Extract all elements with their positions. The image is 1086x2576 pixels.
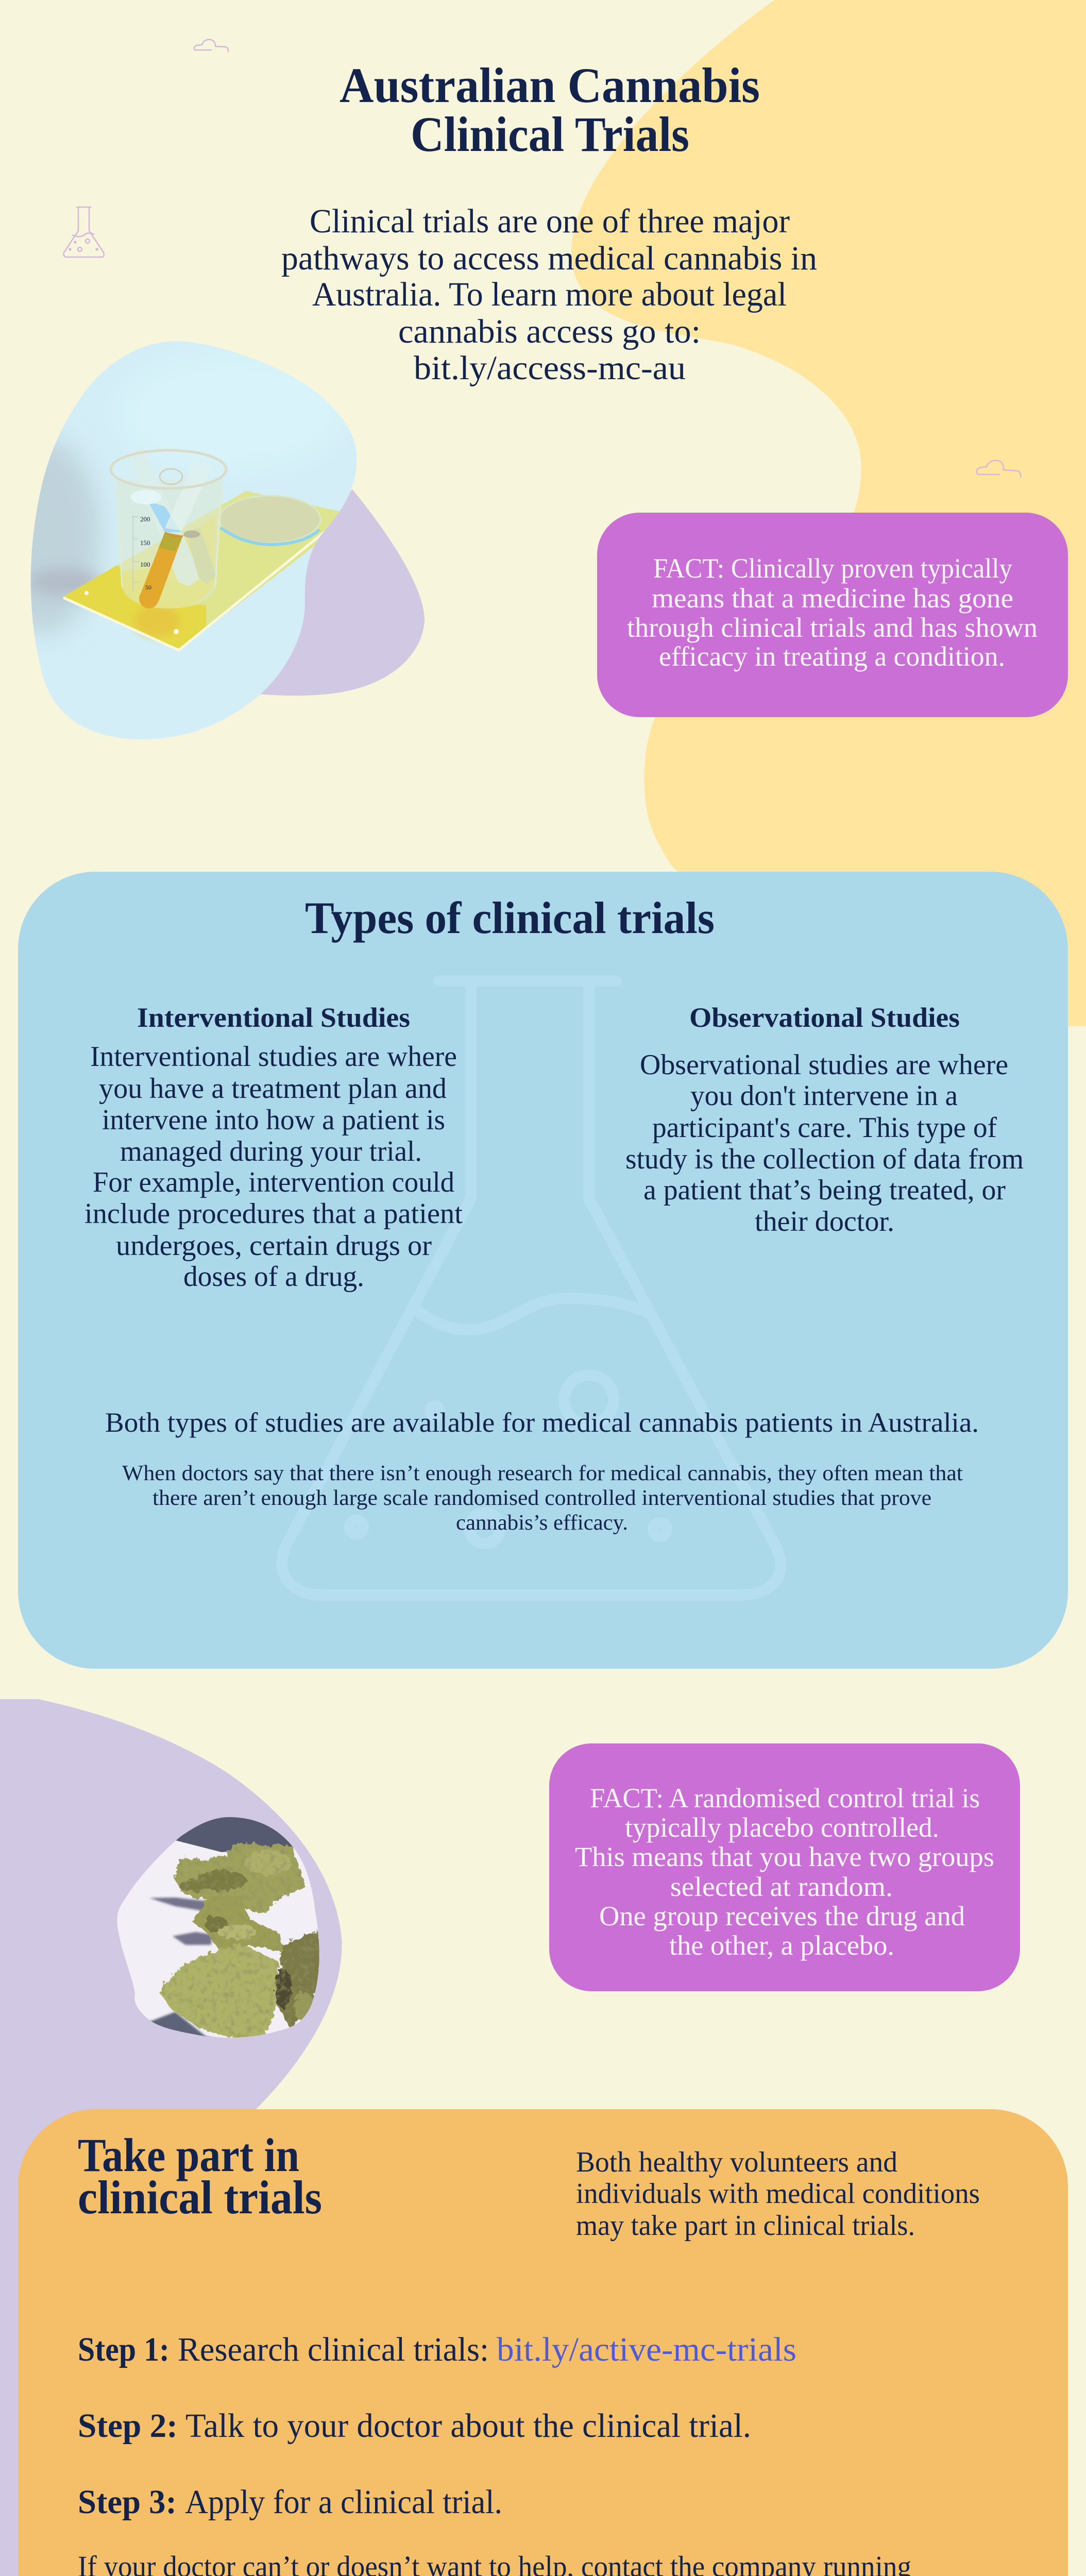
step 3: Step 3: (78, 2483, 177, 2521)
purple blob behind beaker photo (258, 489, 425, 696)
step 2: Step 2: (78, 2407, 178, 2445)
heading: Types of clinical trials (305, 893, 715, 943)
observational studies (625, 1002, 1024, 1238)
fact box 1: efficacy in treating a condition. (659, 641, 1005, 672)
interventional studies (84, 1002, 463, 1293)
photo: beaker with test tubes (31, 341, 357, 739)
fact box 1 (597, 513, 1068, 717)
photo: beaker with test tubes: 200 (140, 515, 150, 523)
photo: beaker with test tubes: 100 (140, 561, 150, 568)
panel: take part in clinical trials (18, 2109, 1068, 2576)
research note: there aren’t enough large scale randomised controlled interventional studies that prove (152, 1486, 931, 1510)
interventional studies: intervene into how a patient is (102, 1104, 445, 1136)
interventional studies: undergoes, certain drugs or (116, 1230, 432, 1262)
watermark flask (282, 981, 780, 1595)
fact box 1: means that a medicine has gone (652, 583, 1013, 614)
photo: beaker with test tubes: 50 (145, 584, 151, 591)
fact box 2: selected at random. (670, 1871, 893, 1902)
intro text: Clinical trials are one of three major (310, 202, 790, 240)
fact box 2: This means that you have two groups (575, 1841, 994, 1872)
panel: types of clinical trials (18, 872, 1068, 1669)
beaker rim (111, 450, 226, 488)
title: Clinical Trials (411, 107, 689, 162)
photo: beaker with test tubes: 150 (140, 539, 150, 547)
test tubes (127, 448, 202, 586)
observational studies: study is the collection of data from (625, 1143, 1024, 1175)
beaker body (116, 479, 223, 608)
observational studies: a patient that’s being treated, or (643, 1174, 1006, 1206)
fact box 2: the other, a placebo. (669, 1930, 894, 1961)
interventional studies: managed during your trial. (120, 1136, 422, 1167)
research note: cannabis’s efficacy. (456, 1511, 628, 1535)
fact box 2: FACT: A randomised control trial is (590, 1783, 980, 1814)
interventional studies: doses of a drug. (183, 1261, 364, 1293)
yellow background blob (571, 0, 1086, 1026)
step 1 (78, 2331, 796, 2368)
icon: small flask (64, 207, 104, 257)
intro text: Australia. To learn more about legal (312, 276, 787, 313)
interventional studies: Interventional studies are where (90, 1041, 457, 1073)
purple background blob (0, 1699, 342, 2576)
orange tube (140, 532, 183, 601)
step 1: bit.ly/active-mc-trials (497, 2331, 796, 2368)
eligibility text: may take part in clinical trials. (576, 2210, 915, 2242)
title: Australian Cannabis (340, 58, 760, 113)
both types statement: Both types of studies are available for medical cannabis patients in Australia. (105, 1407, 979, 1438)
interventional studies: you have a treatment plan and (99, 1073, 447, 1105)
interventional studies: include procedures that a patient (84, 1198, 463, 1230)
observational studies: Observational studies are where (640, 1049, 1008, 1081)
eligibility text: individuals with medical conditions (576, 2178, 980, 2210)
observational studies: Observational Studies (689, 1002, 960, 1033)
step 3: Apply for a clinical trial. (185, 2483, 502, 2521)
icon: cloud left (194, 40, 228, 52)
intro text: cannabis access go to: (398, 313, 701, 350)
fact box 2: One group receives the drug and (599, 1901, 965, 1931)
interventional studies: For example, intervention could (93, 1166, 454, 1198)
observational studies: you don't intervene in a (690, 1080, 958, 1112)
photo: cannabis buds (117, 1817, 319, 2038)
research note (122, 1462, 963, 1535)
fact box 2: typically placebo controlled. (625, 1812, 939, 1843)
intro text: pathways to access medical cannabis in (281, 240, 817, 277)
research note: When doctors say that there isn’t enough research for medical cannabis, they often mean that (122, 1462, 963, 1485)
interventional studies: Interventional Studies (137, 1002, 410, 1033)
heading: Take part in (78, 2129, 299, 2181)
heading (78, 2129, 322, 2224)
title (340, 58, 760, 162)
fact box 2 (549, 1743, 1020, 1991)
fact box 1: through clinical trials and has shown (627, 612, 1038, 643)
intro text (281, 202, 817, 387)
eligibility text: Both healthy volunteers and (576, 2146, 897, 2178)
observational studies: participant's care. This type of (652, 1112, 997, 1144)
step 2: Talk to your doctor about the clinical trial. (185, 2407, 751, 2445)
eligibility text (576, 2146, 980, 2242)
beaker scale (131, 515, 139, 592)
intro text: bit.ly/access-mc-au (414, 349, 686, 387)
observational studies: their doctor. (755, 1206, 894, 1238)
step 1: Step 1: (78, 2331, 169, 2368)
fact box 1: FACT: Clinically proven typically (653, 553, 1012, 584)
step 1: Research clinical trials: (178, 2331, 489, 2368)
heading: clinical trials (78, 2171, 322, 2224)
icon: cloud right (977, 461, 1021, 477)
